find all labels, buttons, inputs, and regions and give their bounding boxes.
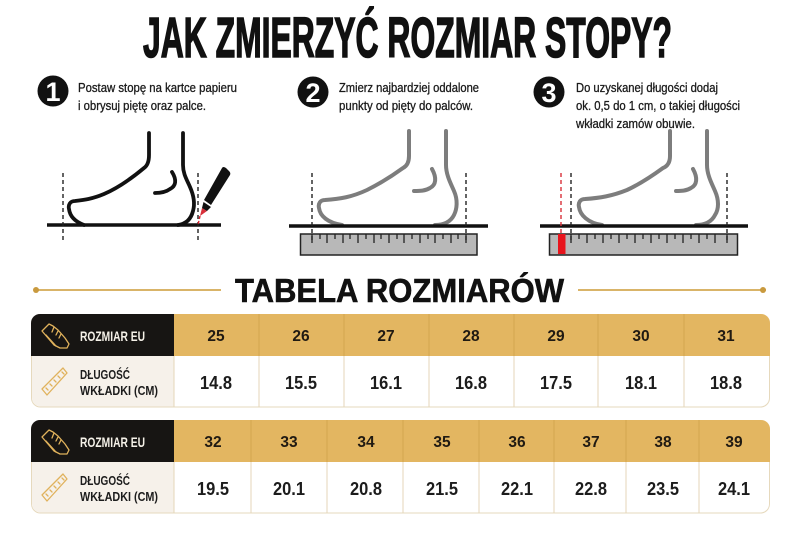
illustration: foot on ruler	[289, 131, 488, 255]
icon: number 1: 1	[45, 77, 61, 107]
row: insole lengths: 21.5	[426, 479, 458, 499]
icon: number 1	[38, 76, 68, 107]
panel: step 2	[289, 76, 488, 255]
row: EU sizes: 37	[582, 434, 600, 451]
row: EU sizes: 27	[377, 328, 395, 345]
heading: size table: TABELA ROZMIARÓW	[235, 272, 565, 309]
text: step 3 instructions: Do uzyskanej długości dodaj	[576, 80, 718, 95]
row: EU sizes: 26	[292, 328, 310, 345]
row: insole lengths: 17.5	[540, 373, 572, 393]
text: step 2 instructions: Zmierz najbardziej oddalone	[339, 80, 479, 95]
row: EU sizes: 35	[433, 434, 451, 451]
table: sizes 32-39	[31, 420, 770, 513]
row: EU sizes: 38	[654, 434, 672, 451]
text: step 2 instructions: punkty od pięty do palców.	[339, 98, 473, 113]
row: insole lengths: 18.8	[710, 373, 742, 393]
row: EU sizes: 39	[725, 434, 743, 451]
row: insole lengths: 14.8	[200, 373, 232, 393]
row: EU sizes: 30	[632, 328, 650, 345]
icon: ruler	[42, 368, 67, 395]
row: insole lengths: 19.5	[197, 479, 229, 499]
text: step 1 instructions	[78, 80, 237, 113]
row: insole lengths: 22.1	[501, 479, 533, 499]
row: EU sizes: 32	[204, 434, 222, 451]
row: EU sizes: 34	[357, 434, 375, 451]
text: step 1 instructions: i obrysuj piętę oraz palce.	[78, 98, 206, 113]
row: insole lengths: 20.1	[273, 479, 305, 499]
row: insole lengths: 22.8	[575, 479, 607, 499]
text: step 2 instructions	[339, 80, 479, 113]
icon: number 2	[298, 76, 328, 108]
row: EU sizes: 29	[547, 328, 565, 345]
row: insole lengths: 23.5	[647, 479, 679, 499]
text: step 1 instructions: Postaw stopę na kartce papieru	[78, 80, 237, 95]
label: insole length	[80, 367, 158, 398]
panel: step 3	[534, 76, 748, 255]
label: insole length: WKŁADKI (CM)	[80, 489, 158, 504]
label: insole length: WKŁADKI (CM)	[80, 383, 158, 398]
row: insole lengths: 16.1	[370, 373, 402, 393]
label: size header: ROZMIAR EU	[80, 434, 145, 450]
row: EU sizes: 36	[508, 434, 526, 451]
row: EU sizes	[204, 434, 743, 451]
icon: number 3	[534, 76, 564, 108]
row: insole lengths: 16.8	[455, 373, 487, 393]
text: step 3 instructions: ok. 0,5 do 1 cm, o takiej długości	[576, 98, 740, 113]
icon: shoe	[42, 430, 69, 454]
row: insole lengths: 24.1	[718, 479, 750, 499]
row: insole lengths: 18.1	[625, 373, 657, 393]
icon: number 2: 2	[305, 78, 321, 108]
row: insole lengths	[200, 373, 742, 393]
label: insole length: DŁUGOŚĆ	[80, 473, 130, 488]
row: EU sizes: 25	[207, 328, 225, 345]
row: EU sizes: 28	[462, 328, 480, 345]
row: insole lengths: 15.5	[285, 373, 317, 393]
label: insole length: DŁUGOŚĆ	[80, 367, 130, 382]
illustration: foot outline with marker	[47, 133, 230, 241]
heading: size table	[33, 272, 766, 309]
label: size header: ROZMIAR EU	[80, 328, 145, 344]
illustration: foot on ruler with added margin	[540, 131, 748, 255]
panel: step 1	[38, 76, 237, 241]
row: insole lengths: 20.8	[350, 479, 382, 499]
row: EU sizes	[207, 328, 735, 345]
text: step 3 instructions	[575, 80, 740, 131]
text: step 3 instructions: wkładki zamów obuwie.	[575, 116, 695, 131]
row: insole lengths	[197, 479, 750, 499]
row: EU sizes: 31	[717, 328, 735, 345]
label: insole length	[80, 473, 158, 504]
row: EU sizes: 33	[280, 434, 298, 451]
icon: ruler	[42, 474, 67, 501]
icon: number 3: 3	[541, 78, 557, 108]
table: sizes 25-31	[31, 314, 770, 407]
icon: shoe	[42, 324, 69, 348]
